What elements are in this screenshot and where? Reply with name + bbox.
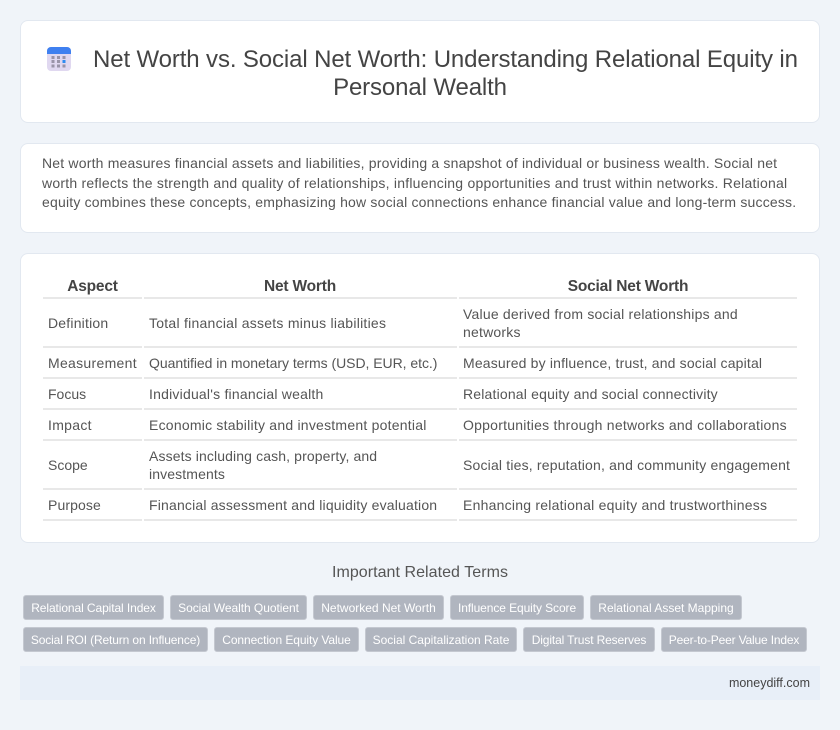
row: Scope: Assets including cash, property, and: [149, 448, 377, 464]
heading: related terms: Important Related Terms: [332, 564, 508, 581]
tag: [661, 627, 807, 652]
title: [93, 46, 798, 101]
row: Definition: [48, 306, 738, 340]
row: Measurement: Quantified in monetary terms (USD, EUR, etc.): [149, 355, 437, 371]
tag: [590, 595, 742, 620]
row: Scope: Scope: [48, 457, 88, 473]
row: Purpose: Enhancing relational equity and trustworthiness: [463, 497, 767, 513]
tag: [214, 627, 359, 652]
tag: [365, 627, 517, 652]
title: Personal Wealth: [333, 74, 507, 101]
tag: Networked Net Worth: [321, 601, 436, 615]
tag: Relational Capital Index: [31, 601, 156, 615]
row: Focus: Focus: [48, 386, 86, 402]
row: Focus: Individual's financial wealth: [149, 386, 324, 402]
column header: Aspect: Aspect: [67, 278, 118, 295]
tag: [23, 595, 164, 620]
row: Scope: investments: [149, 466, 225, 482]
tag: Digital Trust Reserves: [532, 633, 646, 647]
intro paragraph: worth reflects the strength and quality of relationships, influencing opportunities and trust within networks. Relational: [42, 174, 787, 190]
row: Focus: [48, 386, 718, 402]
panel: title card: [20, 20, 820, 123]
intro paragraph: equity combines these concepts, emphasizing how social connections enhance financial value and long-term success.: [42, 194, 796, 210]
intro paragraph: [42, 155, 796, 210]
row: Impact: [48, 417, 787, 433]
row: Purpose: Financial assessment and liquidity evaluation: [149, 497, 437, 513]
tag: Social Wealth Quotient: [178, 601, 299, 615]
tag: [523, 627, 655, 652]
tag: [23, 627, 208, 652]
tag: Social Capitalization Rate: [373, 633, 509, 647]
footer source text: moneydiff.com: [729, 676, 810, 690]
row: Scope: Social ties, reputation, and community engagement: [463, 457, 790, 473]
row: Purpose: [48, 497, 767, 513]
title: Net Worth vs. Social Net Worth: Understanding Relational Equity in: [93, 46, 798, 73]
tag: Peer-to-Peer Value Index: [669, 633, 799, 647]
row: Impact: Opportunities through networks and collaborations: [463, 417, 787, 433]
row: Impact: Economic stability and investment potential: [149, 417, 427, 433]
row: Measurement: Measurement: [48, 355, 137, 371]
tag: Influence Equity Score: [458, 601, 576, 615]
row: Measurement: [48, 355, 762, 371]
tag: [313, 595, 444, 620]
panel: intro text card: [20, 143, 820, 233]
tag: [170, 595, 307, 620]
panel: comparison table card: [20, 253, 820, 543]
row: Definition: Value derived from social relationships and: [463, 306, 738, 322]
row: Definition: networks: [463, 324, 521, 340]
footer bar: [20, 666, 820, 700]
row: Focus: Relational equity and social connectivity: [463, 386, 718, 402]
tag: Social ROI (Return on Influence): [31, 633, 200, 647]
related terms tags: [23, 595, 807, 652]
tag: Relational Asset Mapping: [598, 601, 734, 615]
row: Purpose: Purpose: [48, 497, 101, 513]
row: Impact: Impact: [48, 417, 92, 433]
row: Measurement: Measured by influence, trust, and social capital: [463, 355, 762, 371]
icon: calendar: [47, 47, 71, 71]
tag: [450, 595, 584, 620]
tag: Connection Equity Value: [222, 633, 351, 647]
intro paragraph: Net worth measures financial assets and liabilities, providing a snapshot of individual or business wealth. Social net: [42, 155, 777, 171]
column header: Social Net Worth: Social Net Worth: [568, 278, 688, 295]
row: Scope: [48, 448, 790, 482]
column header: Net Worth: Net Worth: [264, 278, 336, 295]
row: Definition: Definition: [48, 315, 108, 331]
row: Definition: Total financial assets minus liabilities: [149, 315, 386, 331]
